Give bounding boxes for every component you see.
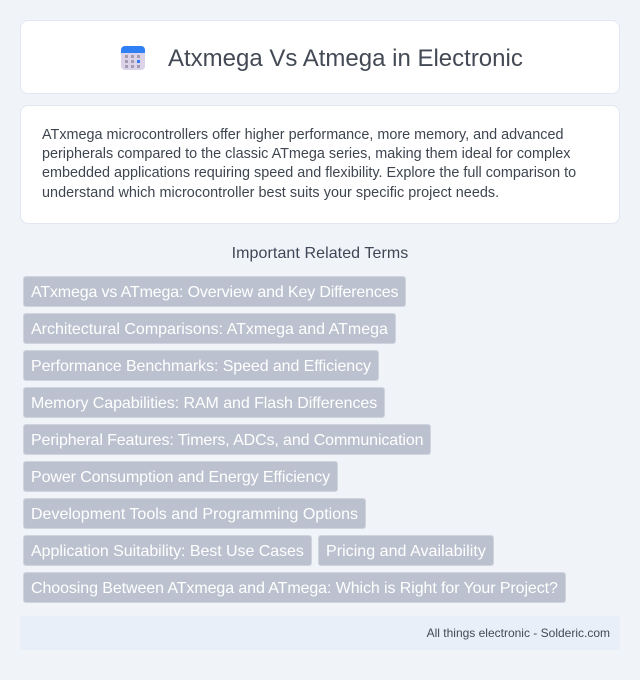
intro text: understand which microcontroller best suits your specific project needs. xyxy=(42,185,499,201)
term chip 1 xyxy=(23,276,406,307)
term chip 9 xyxy=(318,535,494,566)
term chip 5: Peripheral Features: Timers, ADCs, and Communication xyxy=(31,432,423,449)
intro text xyxy=(42,127,576,201)
term chip 1: ATxmega vs ATmega: Overview and Key Differences xyxy=(31,284,398,301)
term chip 5 xyxy=(23,424,431,455)
title: Atxmega Vs Atmega in Electronic xyxy=(168,45,523,72)
footer text: All things electronic - Solderic.com xyxy=(427,626,610,640)
intro text: embedded applications requiring speed and flexibility. Explore the full comparison to xyxy=(42,165,576,181)
intro text: peripherals compared to the classic ATmega series, making them ideal for complex xyxy=(42,146,570,162)
icon: calendar xyxy=(121,46,145,70)
intro text: ATxmega microcontrollers offer higher performance, more memory, and advanced xyxy=(42,127,563,143)
term chip 4: Memory Capabilities: RAM and Flash Differences xyxy=(31,395,377,412)
term chip 9: Pricing and Availability xyxy=(326,543,486,560)
term chip 6: Power Consumption and Energy Efficiency xyxy=(31,469,330,486)
term chip 7 xyxy=(23,498,366,529)
term chip 10 xyxy=(23,572,566,603)
term chip 2 xyxy=(23,313,396,344)
term chip 7: Development Tools and Programming Options xyxy=(31,506,358,523)
term chip 3 xyxy=(23,350,379,381)
term chip 8 xyxy=(23,535,312,566)
intro text panel xyxy=(20,105,620,224)
term chip 3: Performance Benchmarks: Speed and Efficiency xyxy=(31,358,371,375)
header card xyxy=(20,20,620,94)
term chip 8: Application Suitability: Best Use Cases xyxy=(31,543,304,560)
term chip 10: Choosing Between ATxmega and ATmega: Which is Right for Your Project? xyxy=(31,580,558,597)
footer bar xyxy=(20,616,620,650)
section heading: Important Related Terms xyxy=(232,245,408,262)
related terms list xyxy=(23,276,566,603)
term chip 6 xyxy=(23,461,338,492)
term chip 2: Architectural Comparisons: ATxmega and ATmega xyxy=(31,321,388,338)
term chip 4 xyxy=(23,387,385,418)
